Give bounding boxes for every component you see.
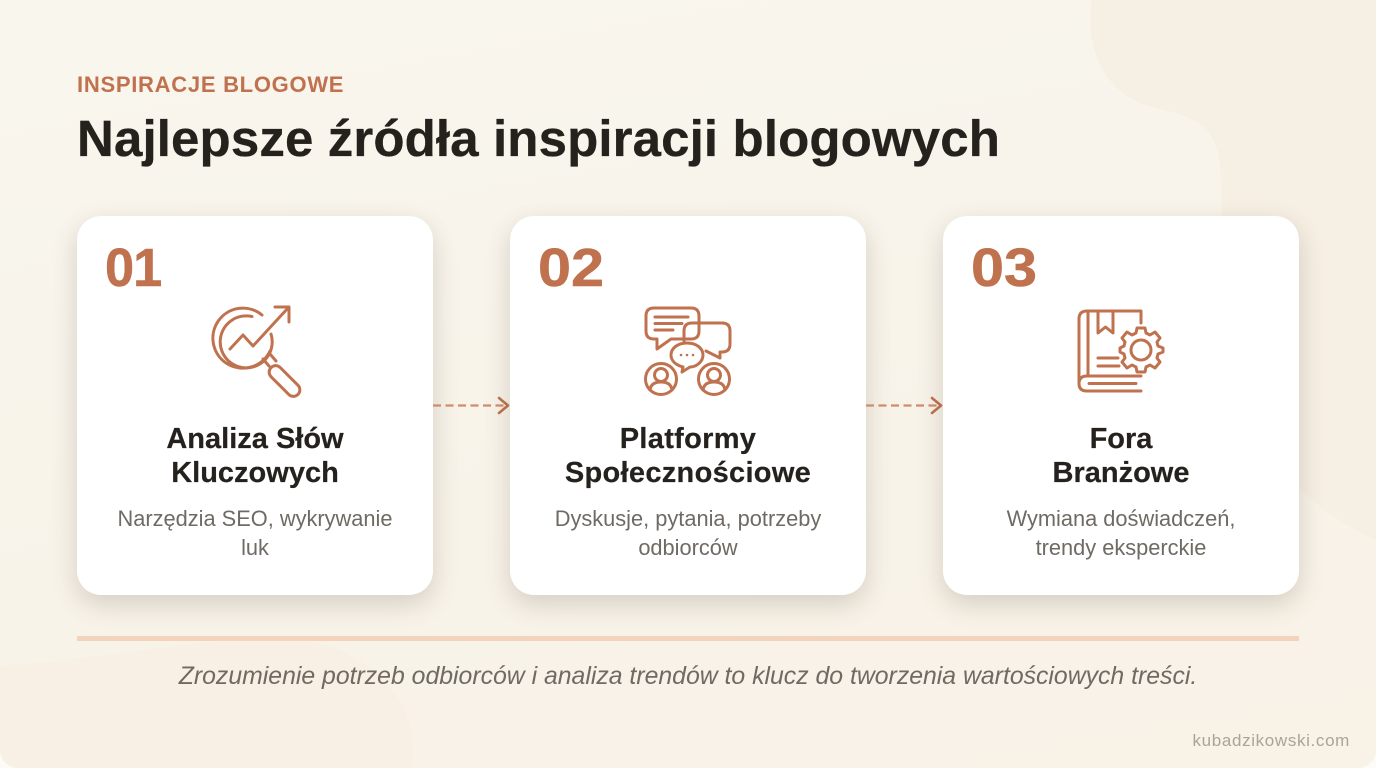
card description: luk bbox=[241, 535, 269, 560]
panel: card 3 bbox=[943, 216, 1299, 595]
title: Najlepsze źródła inspiracji blogowych bbox=[77, 110, 1000, 167]
card heading: Kluczowych bbox=[171, 457, 339, 489]
step number 01: 01 bbox=[105, 238, 161, 298]
summary statement: Zrozumienie potrzeb odbiorców i analiza trendów to klucz do tworzenia wartościowych treści. bbox=[179, 663, 1197, 690]
card description: Narzędzia SEO, wykrywanie bbox=[118, 506, 392, 531]
card heading bbox=[565, 423, 811, 489]
card description: Wymiana doświadczeń, bbox=[1007, 506, 1235, 531]
arrow: card 1 to card 2 bbox=[433, 396, 510, 414]
icon: chat bubbles and people bbox=[644, 306, 732, 396]
card description: odbiorców bbox=[638, 535, 738, 560]
step number 02: 02 bbox=[538, 238, 604, 298]
icon: book with gear bbox=[1078, 310, 1164, 392]
eyebrow label: INSPIRACJE BLOGOWE bbox=[77, 72, 344, 97]
card heading: Społecznościowe bbox=[565, 457, 811, 489]
arrow: card 2 to card 3 bbox=[866, 396, 942, 414]
divider line bbox=[77, 636, 1299, 641]
card description: trendy eksperckie bbox=[1036, 535, 1206, 560]
step number 03: 03 bbox=[971, 238, 1037, 298]
card description bbox=[555, 506, 822, 560]
card heading: Platformy bbox=[620, 423, 756, 455]
card heading: Branżowe bbox=[1052, 457, 1189, 489]
card heading bbox=[166, 423, 344, 489]
card description bbox=[1006, 506, 1235, 560]
card heading bbox=[1052, 423, 1189, 489]
panel: card 2 bbox=[510, 216, 866, 595]
icon: magnifier with growth arrow bbox=[211, 306, 302, 398]
card description bbox=[118, 506, 392, 560]
card description: Dyskusje, pytania, potrzeby bbox=[555, 506, 821, 531]
panel: card 1 bbox=[77, 216, 433, 595]
website credit: kubadzikowski.com bbox=[1192, 731, 1350, 750]
card heading: Analiza Słów bbox=[166, 423, 344, 455]
card heading: Fora bbox=[1090, 423, 1152, 455]
